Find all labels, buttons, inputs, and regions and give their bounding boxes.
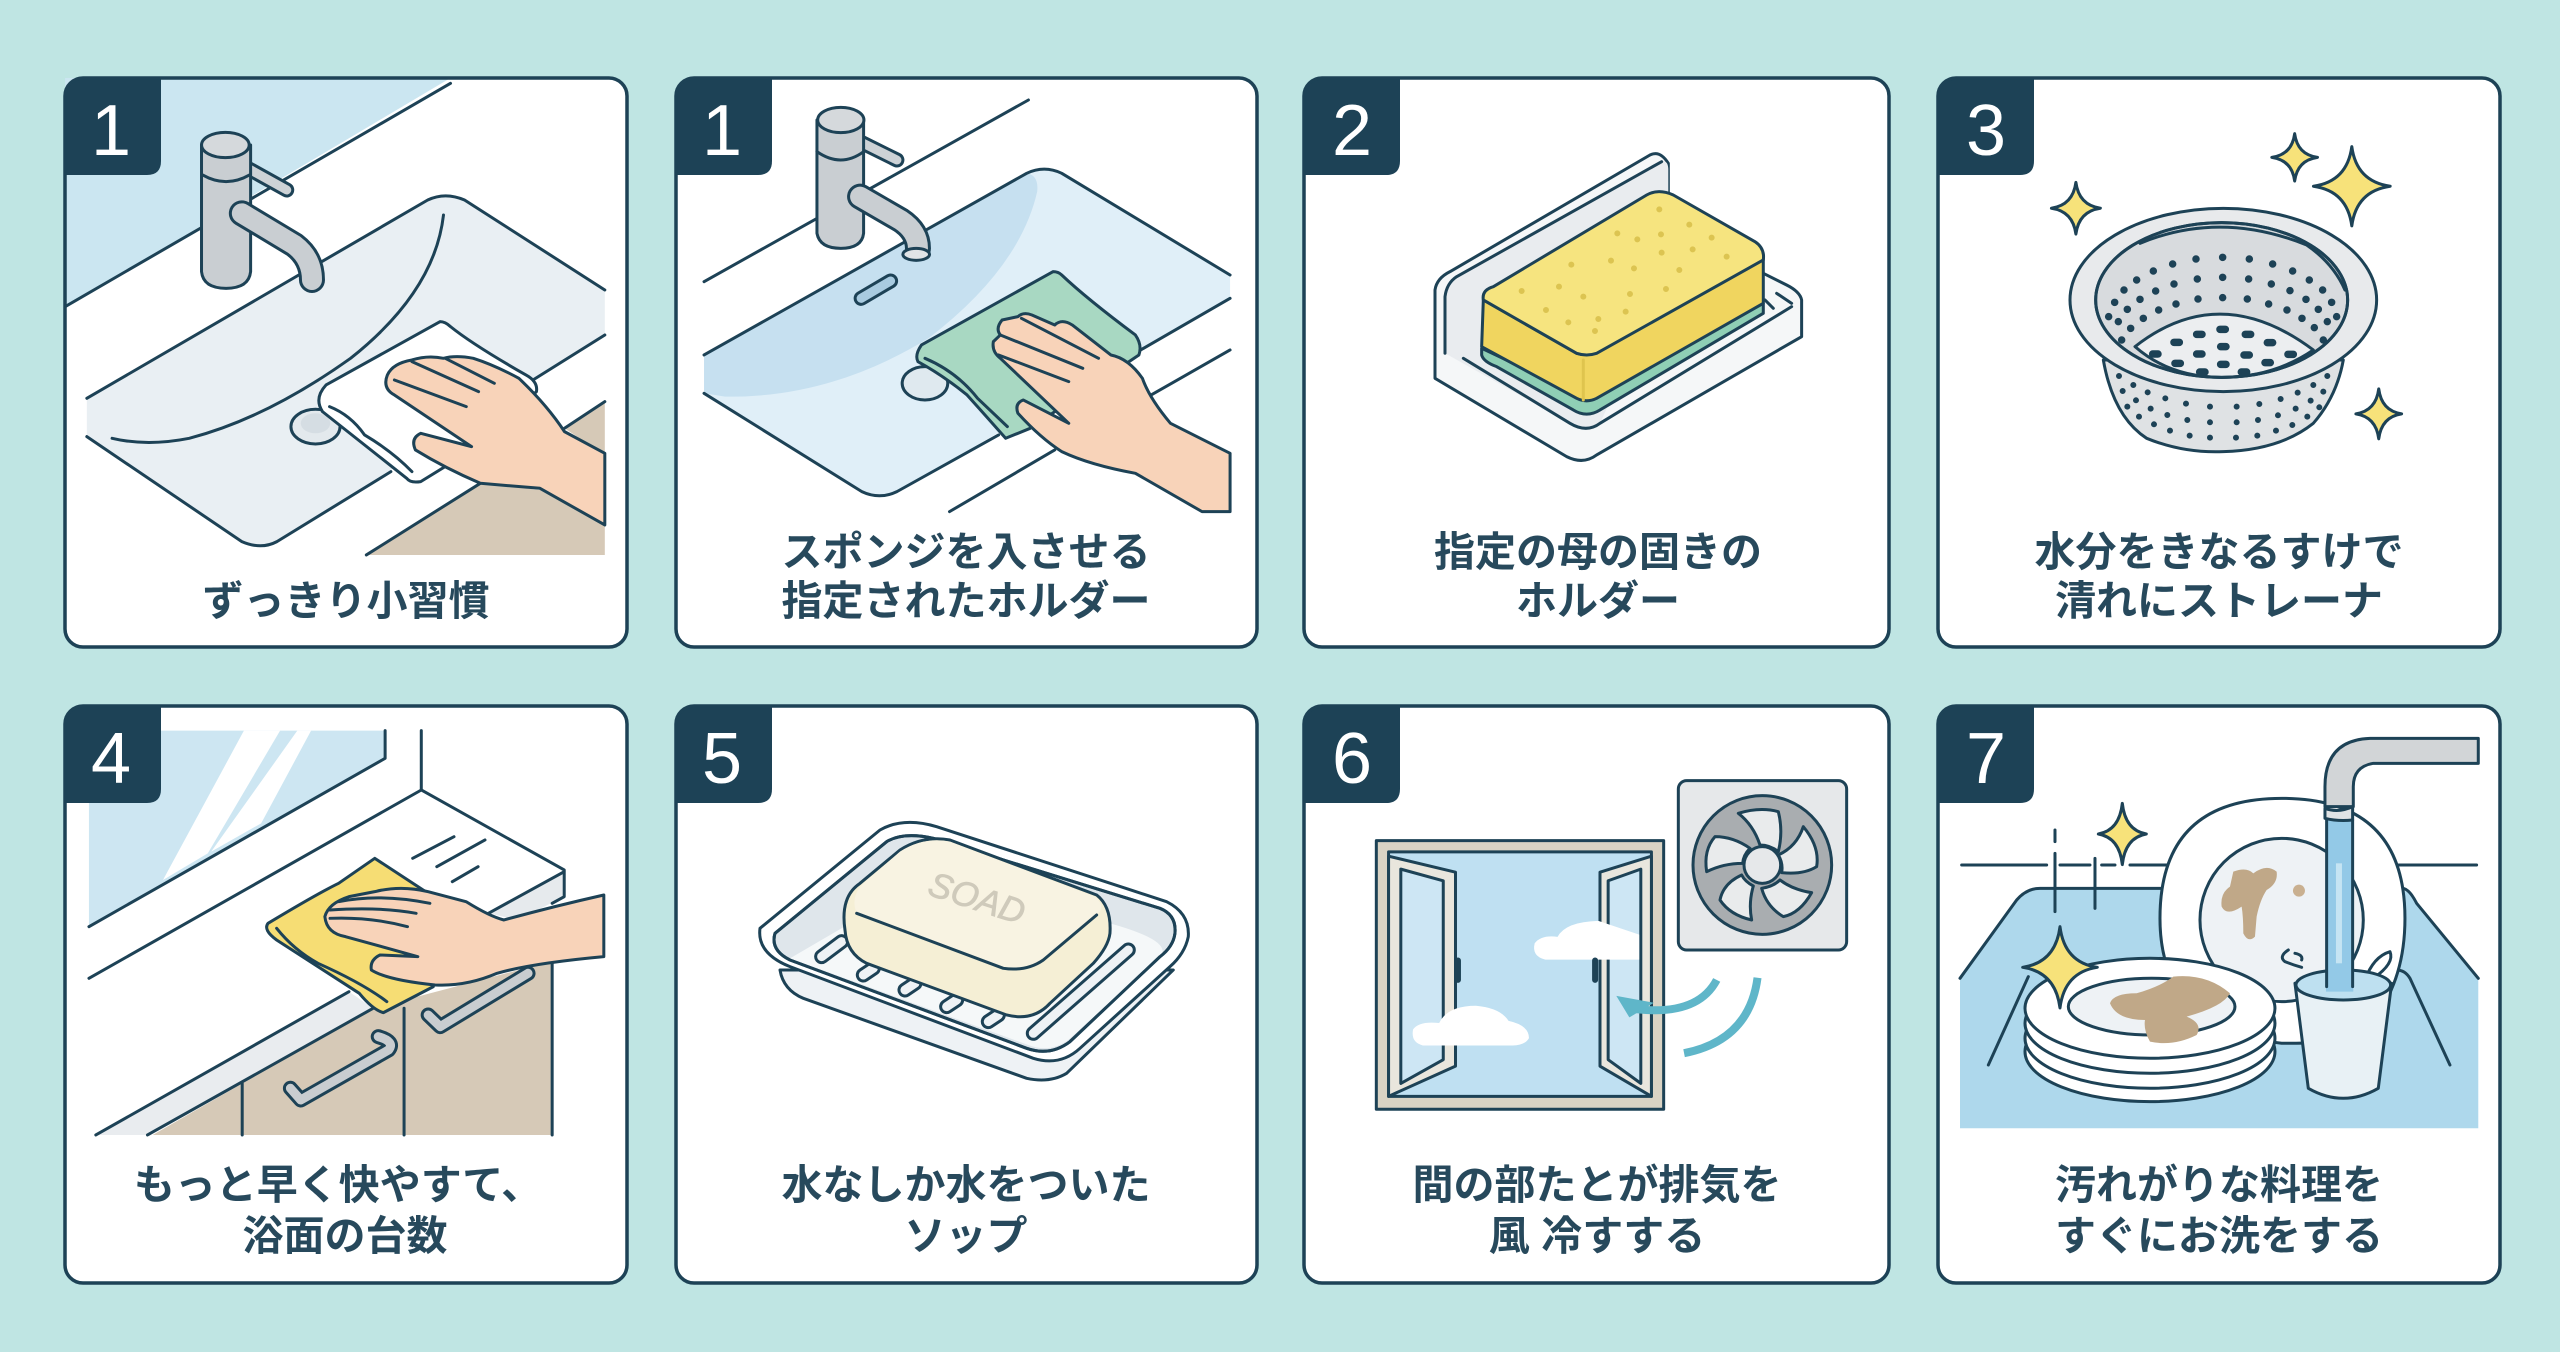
caption: card 7: 風 冷すする xyxy=(1489,1213,1705,1259)
illustration: soap on tray xyxy=(760,822,1188,1080)
illustration: sponge in holder xyxy=(1435,154,1802,460)
panel: card 5 counter wipe xyxy=(65,706,627,1283)
icon: tray xyxy=(760,822,1188,1080)
icon: faucet xyxy=(202,132,312,288)
icon: strainer rim and inside xyxy=(2070,208,2377,392)
caption: card 4: 清れにストレーナ xyxy=(2055,578,2383,624)
badge: step 4 xyxy=(65,706,161,803)
illustration: open window and airflow xyxy=(1376,841,1758,1109)
icon: faucet and water xyxy=(2325,738,2478,992)
badge: step 7 xyxy=(1938,706,2034,803)
icon: hand xyxy=(993,314,1230,512)
caption: card 3 xyxy=(1434,529,1762,624)
icon: ventilation fan xyxy=(1678,781,1847,950)
soap label: SOAD xyxy=(924,865,1030,932)
icon: green cloth xyxy=(917,272,1140,438)
caption: card 3: ホルダー xyxy=(1516,578,1680,624)
panel: card 6 soap dish xyxy=(676,706,1257,1283)
caption: card 2: 指定されたホルダー xyxy=(782,578,1150,624)
badge: step 6: 6 xyxy=(1332,719,1372,799)
illustration: hand wiping blue sink with green cloth xyxy=(704,100,1230,512)
badge: step 7: 7 xyxy=(1966,719,2006,799)
icon: mirror xyxy=(89,731,421,927)
caption: card 7 xyxy=(1412,1162,1782,1259)
icon: sparkles xyxy=(2051,134,2402,439)
illustration: hand wiping counter with yellow cloth xyxy=(89,731,604,1135)
icon: counter xyxy=(89,790,564,978)
icon: sponge xyxy=(1482,192,1764,414)
badge: step 5: 5 xyxy=(702,719,742,799)
badge: step 6 xyxy=(1304,706,1400,803)
caption: card 2: スポンジを入させる xyxy=(782,529,1150,575)
badge: step 1: 1 xyxy=(91,91,131,171)
caption: card 5 xyxy=(134,1162,542,1259)
icon: glass xyxy=(2295,952,2392,1098)
badge: step 3 xyxy=(1938,78,2034,175)
badge: step 4: 4 xyxy=(91,719,131,799)
caption: card 7: 間の部たとが排気を xyxy=(1412,1162,1782,1208)
icon: holder xyxy=(1435,154,1802,460)
icon: sparkles xyxy=(2023,803,2146,1008)
panel: card 3 sponge on holder xyxy=(1304,78,1889,647)
panel: card 7 ventilation xyxy=(1304,706,1889,1283)
icon: hand xyxy=(325,888,604,985)
caption: card 3: 指定の母の固きの xyxy=(1434,529,1762,575)
caption: card 8: 汚れがりな料理を xyxy=(2055,1162,2383,1208)
caption: card 4: 水分をきなるすけで xyxy=(2034,529,2404,575)
badge: step 1 xyxy=(65,78,161,175)
icon: hand xyxy=(386,357,605,525)
icon: basket body xyxy=(2103,360,2343,452)
icon: plate stack xyxy=(2025,958,2275,1102)
icon: white towel xyxy=(319,322,537,482)
illustration: hand wiping sink with white towel xyxy=(65,78,605,555)
arrow: airflow xyxy=(1616,978,1758,1053)
caption: card 1: ずっきり小習慣 xyxy=(202,578,490,624)
badge: step 5 xyxy=(676,706,772,803)
caption: card 2 xyxy=(782,529,1150,624)
icon: cabinet xyxy=(96,872,564,1135)
caption: card 8: すぐにお洗をする xyxy=(2055,1213,2383,1259)
badge: step 3: 3 xyxy=(1966,91,2006,171)
caption: card 8 xyxy=(2055,1162,2383,1259)
panel: card 1 sink habit xyxy=(65,78,627,647)
panel: card 4 strainer xyxy=(1938,78,2500,647)
caption: card 5: もっと早く快やすて、 xyxy=(134,1162,542,1208)
icon: faucet xyxy=(817,107,930,260)
badge: step 1 xyxy=(676,78,772,175)
caption: card 6 xyxy=(782,1162,1150,1259)
caption: card 4 xyxy=(2034,529,2404,624)
caption: card 6: ソップ xyxy=(904,1213,1028,1259)
illustration: dishes washing in sink xyxy=(1960,738,2478,1128)
illustration: clean sink strainer with sparkles xyxy=(2070,208,2377,452)
panel: card 8 dishes xyxy=(1938,706,2500,1283)
panel: card 2 sponge holder sink xyxy=(676,78,1257,647)
badge: step 1: 1 xyxy=(702,91,742,171)
icon: upright plate xyxy=(2160,798,2405,1043)
badge: step 2 xyxy=(1304,78,1400,175)
icon: soap bar xyxy=(844,839,1110,1017)
icon: yellow cloth xyxy=(267,858,433,1013)
caption: card 5: 浴面の台数 xyxy=(242,1213,448,1259)
icon: sink xyxy=(1960,830,2478,1128)
caption: card 6: 水なしか水をついた xyxy=(782,1162,1150,1208)
badge: step 2: 2 xyxy=(1332,91,1372,171)
icon: window xyxy=(1376,841,1664,1109)
